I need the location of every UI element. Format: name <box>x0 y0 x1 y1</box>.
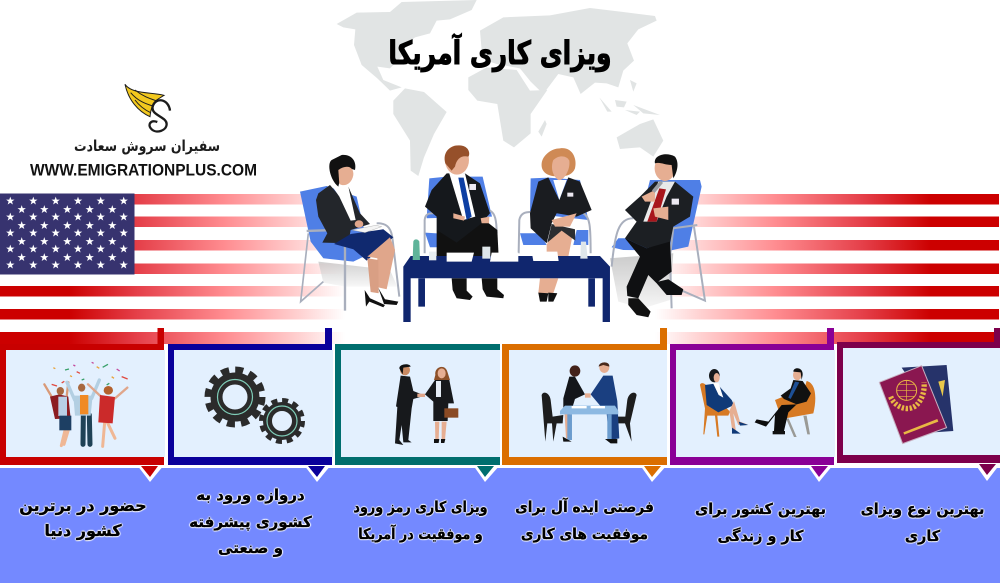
logo persian name: سفیران سروش سعادت <box>74 137 220 155</box>
blue table with papers and bottles <box>403 239 610 322</box>
caption 2: دروازه ورود به <box>196 486 305 504</box>
icon: passports <box>879 365 953 444</box>
caption 3: ویزای کاری رمز ورود <box>353 498 488 516</box>
caption 5: کار و زندگی <box>717 526 804 544</box>
panel 4 orange: meeting table <box>502 328 667 482</box>
caption 1: حضور در برترین <box>19 496 147 515</box>
icon: celebrating people <box>44 362 128 446</box>
caption 6 <box>860 500 985 546</box>
american flag stripes right <box>655 194 999 344</box>
title: ویزای کاری آمریکا <box>388 34 612 72</box>
man with microphone <box>612 154 705 317</box>
panel 3 teal: handshake <box>335 344 500 482</box>
woman taking notes <box>300 155 399 311</box>
icon: two people in orange chairs <box>700 368 815 437</box>
panel 5 purple: seated interview <box>670 328 835 482</box>
caption 5 <box>694 500 826 546</box>
chair shadows <box>318 253 673 308</box>
american flag stripes left <box>0 194 345 344</box>
caption 1 <box>18 496 147 542</box>
caption 4: موفقیت های کاری <box>521 524 648 542</box>
blue caption band <box>0 468 1000 583</box>
caption 3 <box>352 498 488 544</box>
panel 2 navy: gears <box>168 328 333 482</box>
icon: business handshake <box>395 364 458 445</box>
icon: handshake at table <box>542 362 637 443</box>
panel 6 maroon: passports <box>837 328 1000 481</box>
man in blue tie <box>425 145 504 300</box>
caption 3: و موفقیت در آمریکا <box>358 524 483 542</box>
panel discussion illustration <box>300 145 705 322</box>
flag canton with stars <box>0 194 134 274</box>
caption 2 <box>188 486 314 559</box>
logo <box>30 84 257 180</box>
world map background <box>337 0 663 176</box>
panel 1 red: people celebrating <box>0 328 165 482</box>
website url: WWW.EMIGRATIONPLUS.COM <box>30 160 257 180</box>
caption 6: کاری <box>905 526 940 544</box>
caption 2: کشوری پیشرفته <box>189 512 312 530</box>
caption 4 <box>514 496 654 544</box>
icon: golden wing swan <box>125 84 170 131</box>
caption 2: و صنعتی <box>218 539 283 557</box>
caption 4: فرصتی ایده آل برای <box>515 498 654 516</box>
caption 6: بهترین نوع ویزای <box>861 500 984 518</box>
caption 1: کشور دنیا <box>44 521 122 540</box>
icon: gears <box>208 370 302 442</box>
woman with red hair <box>519 148 592 302</box>
caption 5: بهترین کشور برای <box>695 500 826 518</box>
